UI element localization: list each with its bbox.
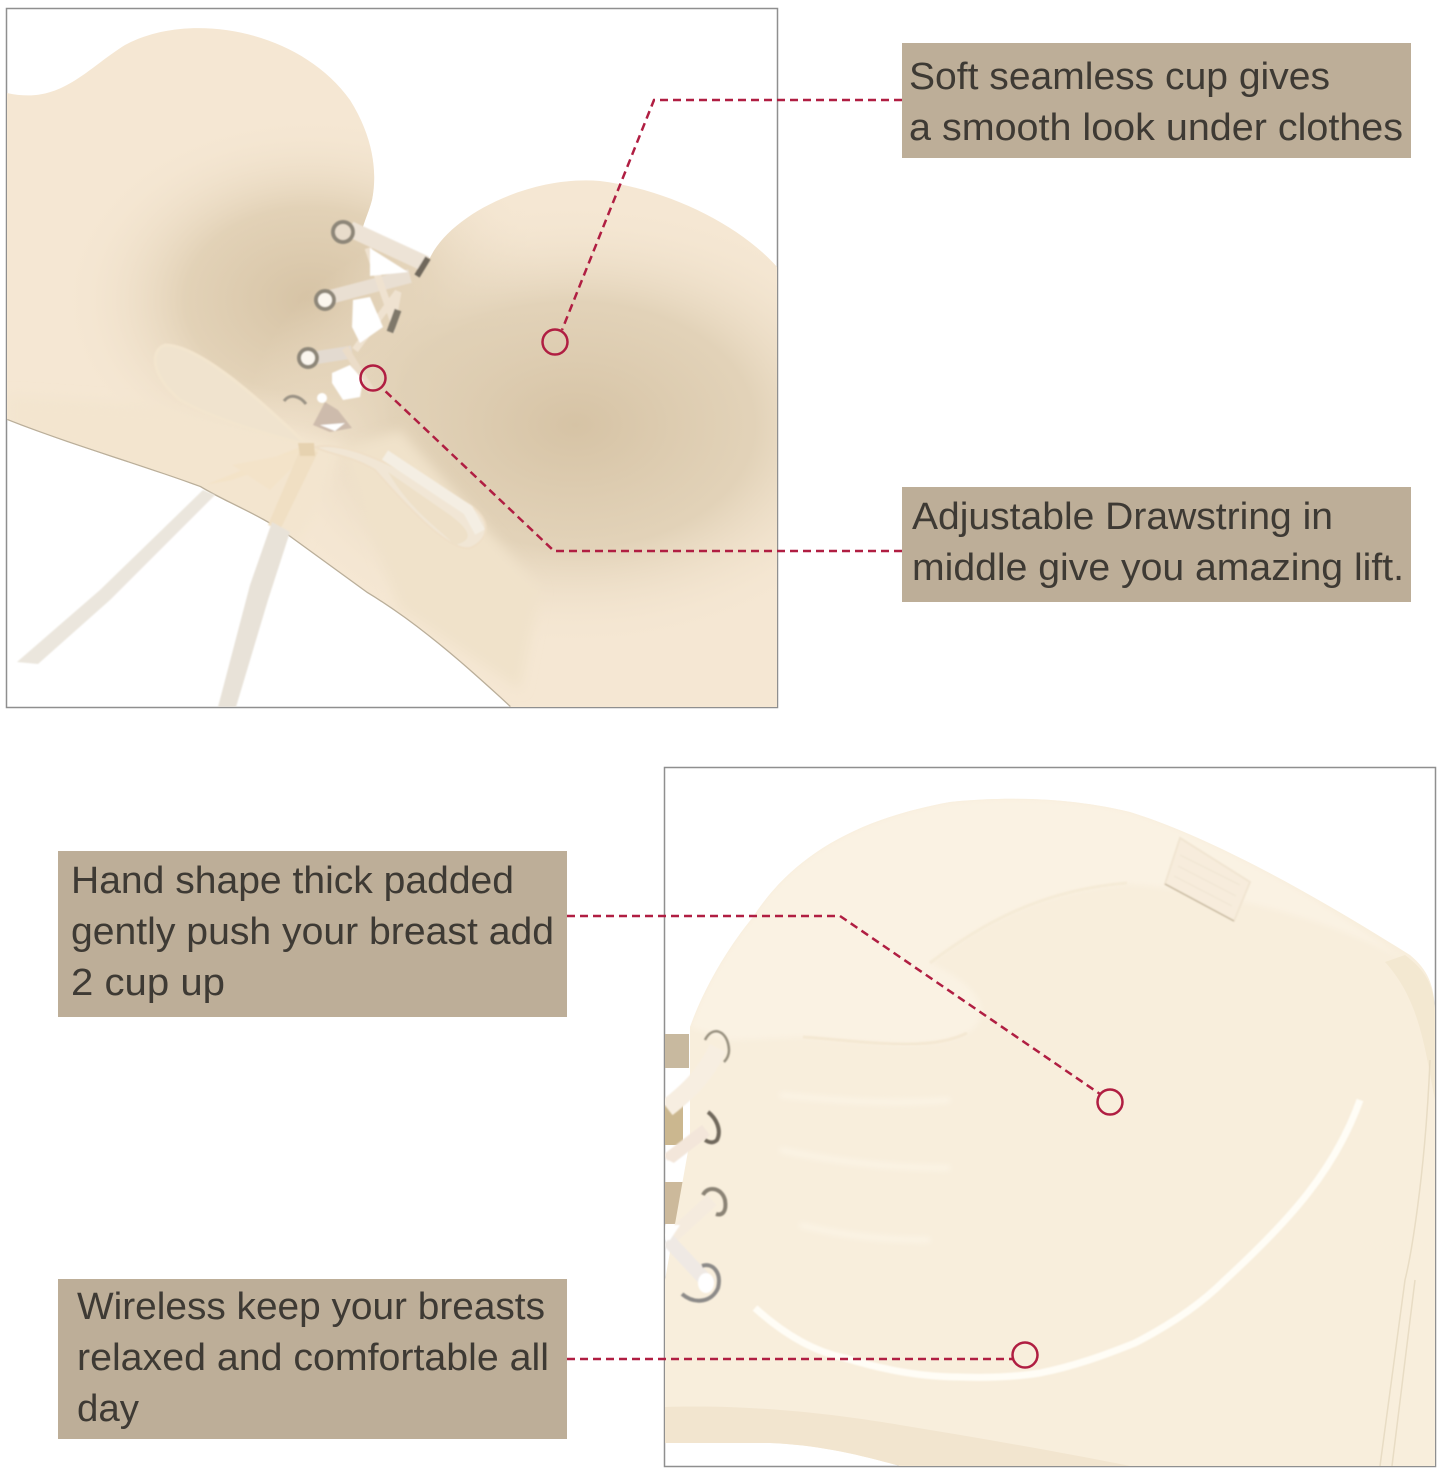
callout box: hand shape padding: 2 cup up	[71, 962, 225, 1004]
product: tag label	[1165, 838, 1250, 921]
callout box: soft seamless cup: a smooth look under clothes	[909, 107, 1403, 149]
callout box: wireless	[58, 1279, 567, 1439]
leader line: wireless	[567, 1342, 1038, 1368]
product: side lacing and eyelets	[665, 1031, 729, 1301]
panel: bottom product photo	[664, 768, 1436, 1466]
callout box: adjustable drawstring	[902, 487, 1411, 602]
callout box: hand shape padding: Hand shape thick padded	[71, 860, 514, 902]
product: padded inner cup	[665, 799, 1435, 1466]
product: ribbon bow	[17, 345, 486, 707]
leader line: hand shape padding	[567, 916, 1122, 1114]
callout box: wireless: day	[77, 1388, 139, 1430]
callout box: adjustable drawstring: Adjustable Drawstring in	[912, 496, 1333, 538]
callout box: adjustable drawstring: middle give you amazing lift.	[912, 547, 1404, 589]
product: lacing backing	[665, 1034, 689, 1224]
leader line: adjustable drawstring	[360, 366, 902, 551]
product: strapless cup body	[7, 28, 777, 707]
callout box: soft seamless cup	[902, 43, 1411, 158]
leader line: soft seamless cup	[542, 100, 902, 354]
callout box: hand shape padding: gently push your breast add	[71, 911, 554, 953]
callout box: soft seamless cup: Soft seamless cup gives	[909, 56, 1330, 98]
product: lacing and eyelets	[284, 222, 428, 432]
callout box: wireless: relaxed and comfortable all	[77, 1337, 549, 1379]
callout box: hand shape padding	[58, 851, 567, 1017]
panel: top product photo	[6, 8, 778, 708]
callout box: wireless: Wireless keep your breasts	[77, 1286, 545, 1328]
